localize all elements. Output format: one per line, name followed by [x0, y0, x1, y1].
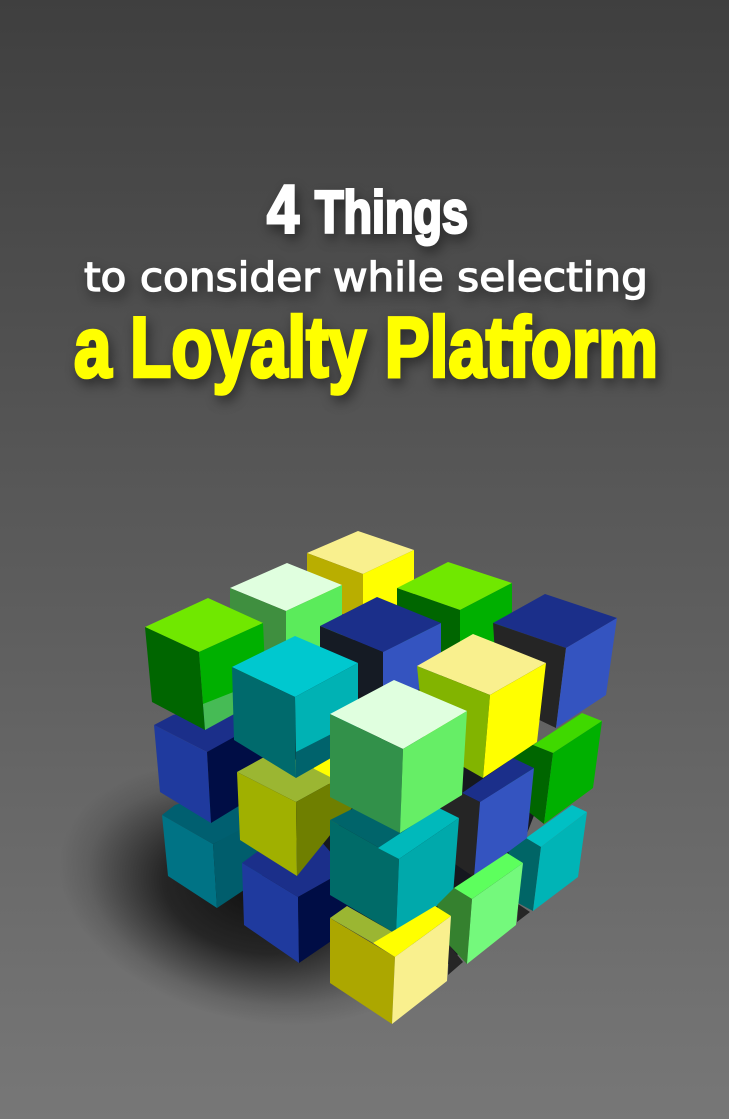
cube: lime back — [397, 562, 512, 665]
cube: teal front — [330, 804, 459, 934]
cube: green right middle — [505, 713, 602, 824]
cube: teal bottom left — [162, 790, 262, 908]
cube: yellow bottom front — [330, 906, 451, 1024]
title — [74, 172, 658, 396]
heading: 4 Things — [267, 172, 468, 248]
cube: yellow top right — [417, 634, 546, 778]
cube: white green front — [330, 680, 467, 833]
cube: teal top left — [232, 636, 358, 778]
cube: teal right bottom — [508, 805, 587, 922]
subheading: to consider while selecting — [84, 255, 648, 301]
cube: pale yellow back — [307, 531, 414, 622]
dark inner core — [230, 640, 540, 965]
yellow sliver behind olive cube — [313, 758, 345, 785]
cube: navy middle right low — [440, 758, 534, 877]
cube: white green back — [230, 563, 342, 662]
cube: light green bottom — [437, 853, 523, 975]
heading: 4 Things: Things — [315, 180, 468, 246]
cube: navy bottom — [242, 840, 360, 963]
cube: olive centre — [237, 750, 352, 876]
cube: navy top centre — [320, 597, 441, 705]
cube cast shadow — [29, 724, 471, 1066]
block cube illustration — [145, 531, 617, 1024]
heading: 4 Things: 4 — [267, 172, 299, 248]
cube: blue top right — [493, 594, 617, 728]
cube: lime top left — [145, 598, 266, 730]
cube: navy middle left — [154, 700, 265, 823]
